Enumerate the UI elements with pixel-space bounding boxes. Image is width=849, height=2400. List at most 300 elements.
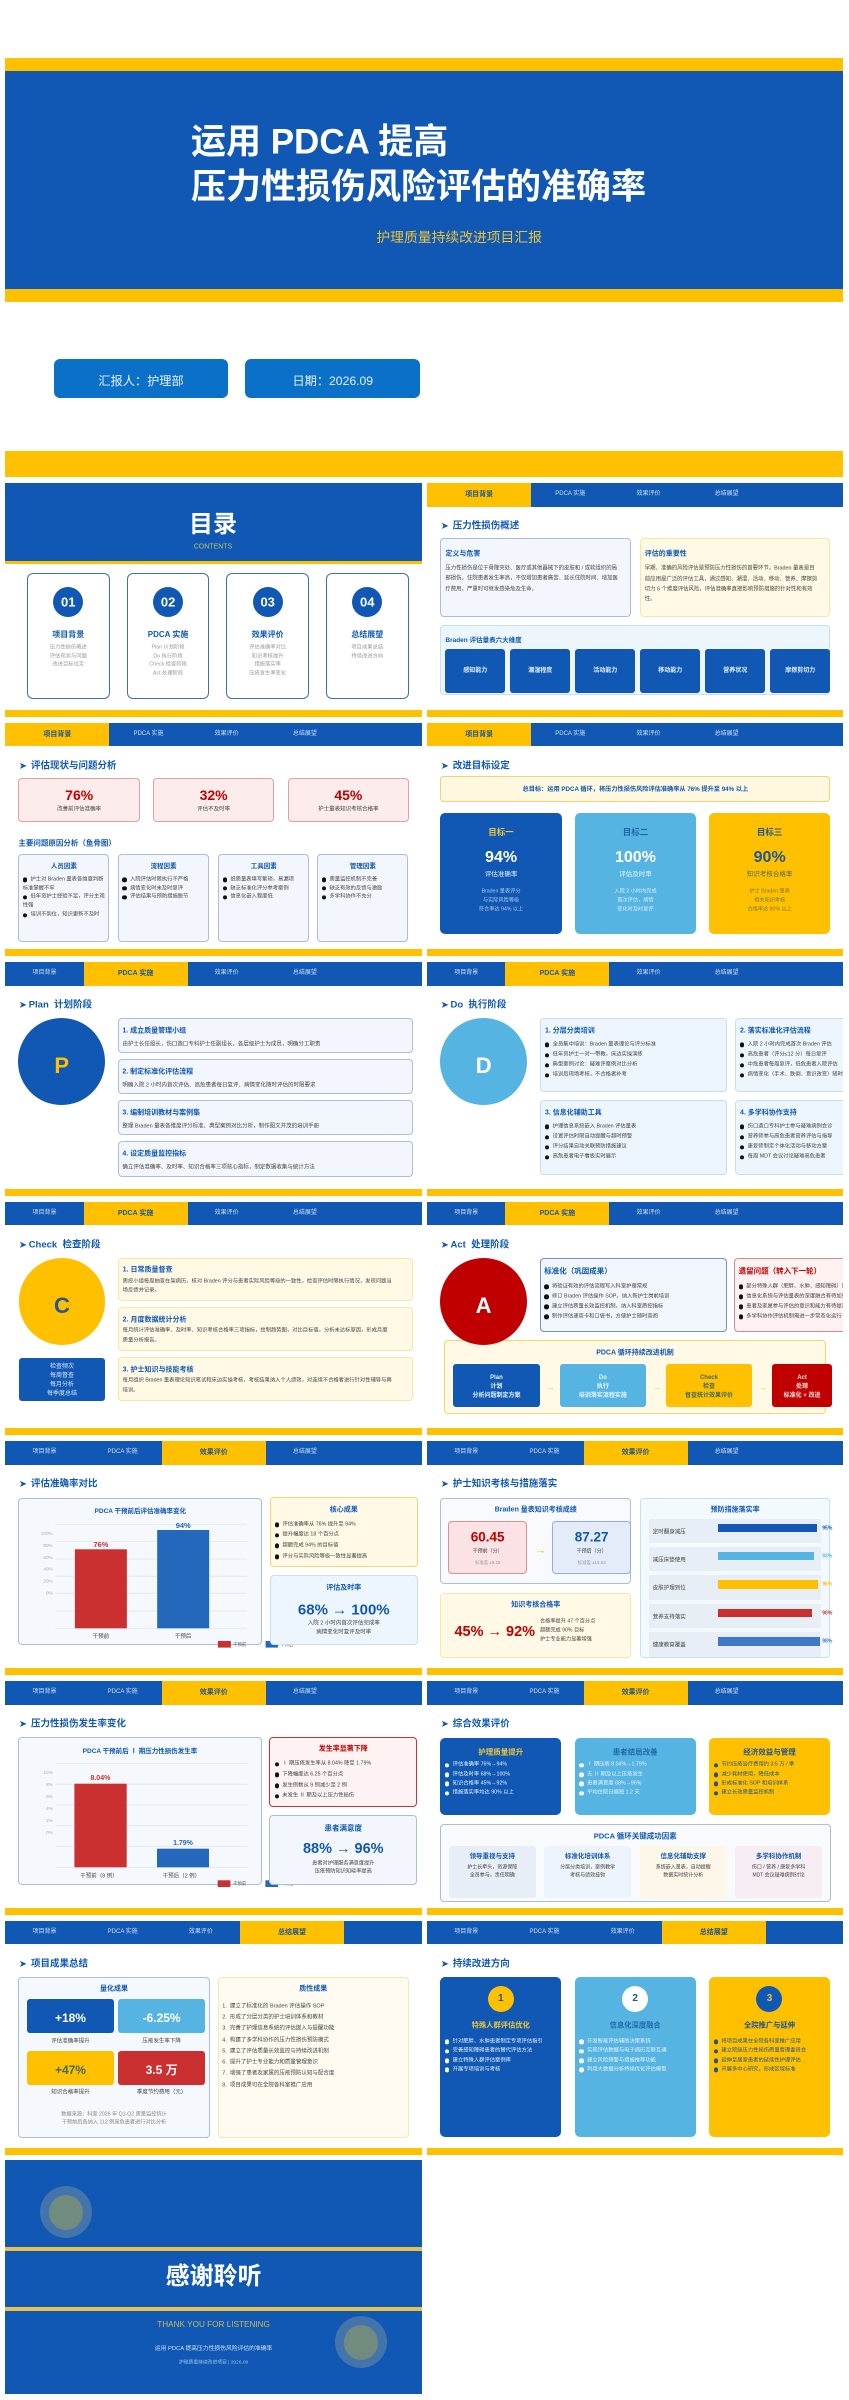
slide: incidence change: 总结展望 (293, 1689, 317, 1695)
do block 3 (540, 1100, 727, 1175)
card 04 (326, 573, 409, 699)
card: informatization (575, 1977, 696, 2137)
panel: key results: 提升幅度达 18 个百分点 (282, 1532, 339, 1538)
title line 1: 运用 PDCA 提高 (191, 122, 448, 162)
subtitle: 护理质量持续改进项目汇报 (376, 230, 542, 245)
panel: quantitative: 量化成果 (100, 1985, 128, 1992)
plan step 1: 由护士长任组长，伤口造口专科护士任副组长，各层级护士为成员，明确分工职责 (122, 1042, 320, 1048)
step: Act: 处理 (796, 1384, 808, 1390)
goal 3: 知识考核合格率 (747, 871, 792, 878)
slide: Check: 总结展望 (293, 1210, 317, 1216)
card: special populations: 开展专项培训与考核 (453, 2066, 500, 2072)
contents english: CONTENTS (194, 543, 232, 550)
card 02: Act 处理阶段 (153, 670, 183, 676)
factor: collaboration: 伤口 / 营养 / 康复多学科 (752, 1864, 805, 1870)
panel: prevention measures (640, 1498, 830, 1658)
metric: savings (118, 2051, 205, 2085)
panel: qualitative: 4. 构建了多学科协作的压力性损伤预防模式 (222, 2037, 329, 2043)
slide: goals: 效果评价 (636, 731, 660, 737)
panel: satisfaction: 患者对护理服务满意度提升 (312, 1860, 374, 1866)
card: informatization: 实现评估数据与电子病历互联互通 (587, 2048, 667, 2054)
section title: ➤ (441, 760, 448, 770)
measure: education: 健康教育覆盖 (653, 1642, 686, 1648)
score after: 87.27 (575, 1529, 609, 1544)
bar chart: incidence: 10% (44, 1770, 53, 1775)
panel: incidence drop: 下降幅度达 6.25 个百分点 (282, 1771, 343, 1777)
date button (245, 359, 420, 398)
card: economy: 节约压疮治疗费用约 3.5 万 / 季 (721, 1762, 794, 1768)
slide: current status (5, 723, 422, 949)
plan step 2: 2. 制定标准化评估流程 (122, 1068, 193, 1075)
section title: 护士知识考核与措施落实 (453, 1479, 557, 1490)
decorative circle top (40, 2186, 92, 2238)
bar chart: accuracy: 干预后 (175, 1632, 192, 1640)
section title: ➤ (19, 999, 27, 1009)
card 01: 项目背景 (52, 630, 84, 639)
slide: Plan: 总结展望 (293, 970, 317, 976)
panel: definition: 定义与危害 (445, 551, 480, 558)
panel: importance (640, 538, 830, 617)
panel: success factors (440, 1824, 831, 1902)
bar chart: incidence: 0% (46, 1830, 53, 1835)
measure: skin care: 皮肤护理到位 (653, 1585, 686, 1591)
check frequency box (19, 1358, 105, 1401)
slide: results summary: PDCA 实施 (108, 1929, 138, 1935)
slide: knowledge and measures (427, 1441, 843, 1668)
arrow: → (653, 1383, 661, 1392)
panel: qualitative (218, 1977, 409, 2138)
panel: prevention measures: 96% (822, 1582, 832, 1588)
cause: management: 管理因素 (350, 862, 376, 869)
factor: leadership: 全员参与，责任明确 (470, 1872, 515, 1878)
date button: 日期：2026.09 (292, 374, 373, 388)
card: informatization: 建立风险预警与措施推荐功能 (587, 2057, 656, 2063)
panel: quantitative: 季度节约费用（元） (137, 2090, 186, 2096)
do block 1: 1. 分层分类培训 (545, 1027, 595, 1034)
english thanks: THANK YOU FOR LISTENING (157, 2320, 270, 2329)
goal 1: 目标一 (488, 827, 514, 837)
factor: informatization: 系统嵌入量表，自动提醒 (656, 1864, 711, 1870)
goal 3: 合格率达 90% 以上 (747, 906, 792, 912)
panel: quantitative (18, 1977, 210, 2138)
metric: savings: 3.5 万 (146, 2063, 178, 2077)
card: hospital rollout: 全院推广与延伸 (744, 2020, 795, 2029)
slide: Plan (5, 962, 422, 1189)
card 03 (226, 573, 309, 699)
section title: ➤ (441, 999, 448, 1009)
measure: nutrition: 营养支持落实 (653, 1614, 686, 1620)
do block 2: 2. 落实标准化评估流程 (740, 1027, 811, 1034)
slide: accuracy comparison: 总结展望 (293, 1449, 317, 1455)
check item 3: 每月组织 Braden 量表理论知识笔试和床边实操考核，考核结果纳入个人绩效，对连续不合格者进行针对性辅导与再 (123, 1378, 392, 1384)
bar chart: incidence: 干预后（2 例） (163, 1871, 200, 1879)
slide: pressure injury overview: 效果评价 (636, 491, 660, 497)
slide: accuracy comparison: 项目背景 (32, 1449, 56, 1455)
bar chart: accuracy: 20% (44, 1578, 53, 1583)
step: Plan: 计划 (490, 1384, 502, 1390)
slide: thank you (5, 2160, 422, 2394)
card: special populations: 特殊人群评估优化 (472, 2020, 530, 2029)
slide: incidence change: 项目背景 (32, 1689, 56, 1695)
panel: satisfaction: 压疮预防知识知晓率提高 (315, 1868, 372, 1874)
panel: importance: 性。 (645, 597, 656, 603)
bar chart: accuracy: 80% (44, 1542, 53, 1547)
goal 3: 90% (754, 849, 786, 866)
metric: accuracy (27, 1999, 114, 2033)
plan step 3: 3. 编制培训教材与案例集 (122, 1109, 200, 1116)
cause: tools: 信息化嵌入程度低 (230, 894, 273, 900)
panel: accuracy chart (18, 1498, 262, 1645)
panel: Braden dimensions: 潮湿程度 (528, 668, 552, 674)
arrow: → (535, 1544, 546, 1556)
card 03: 03 (260, 594, 275, 609)
overall goal banner (440, 776, 830, 802)
cause: people (18, 854, 109, 942)
step: Do: 培训落实流程实施 (579, 1393, 627, 1399)
section title: ➤ (441, 1718, 448, 1728)
bar chart: accuracy: 0% (46, 1590, 53, 1595)
remaining issues box: 多学科协作评估机制需进一步常态化运行 (746, 1313, 842, 1319)
measure: mattress: 减压床垫使用 (653, 1557, 686, 1563)
bar chart: accuracy: 94% (176, 1520, 191, 1529)
slide: future directions: PDCA 实施 (529, 1929, 559, 1935)
panel: pass rate: 护士专业能力显著增强 (540, 1637, 592, 1643)
cause: people: 低年资护士经验不足，评分主观 (30, 894, 105, 900)
factor: collaboration (735, 1846, 822, 1898)
card: special populations: 建立特殊人群评估案例库 (453, 2057, 511, 2063)
panel: pass rate: 超额完成 90% 目标 (540, 1628, 584, 1634)
slide: pressure injury overview: 项目背景 (465, 491, 493, 498)
standardize box: 标准化（巩固成果） (544, 1266, 612, 1275)
section title: 评估准确率对比 (31, 1479, 98, 1490)
slide: contents (5, 483, 422, 709)
score before (448, 1521, 527, 1574)
panel: pass rate: 45% → 92% (454, 1624, 535, 1640)
cause: people: 人员因素 (51, 862, 77, 869)
plan step 1 (118, 1018, 413, 1053)
slide: Check: 项目背景 (32, 1210, 56, 1216)
plan step 4: 4. 设定质量监控指标 (122, 1150, 186, 1157)
card 02: Plan 计划阶段 (151, 645, 185, 651)
card 01: 改进目标设定 (52, 662, 84, 668)
panel: definition (440, 538, 631, 617)
panel: definition: 部损伤。住院患者发生率高，不仅增加患者痛苦、延长住院时间、增加医 (445, 576, 618, 582)
score before: 干预前（分） (473, 1548, 503, 1554)
step: Do: 执行 (597, 1384, 609, 1390)
D circle (440, 1018, 527, 1105)
standardize box: 将验证有效的评估流程写入科室护理常规 (552, 1283, 647, 1289)
slide: Act: 项目背景 (454, 1210, 478, 1216)
decorative circle bottom (335, 2316, 387, 2368)
do block 3: 高危患者电子看板实时展示 (553, 1154, 616, 1160)
slide: goals: PDCA 实施 (555, 731, 585, 737)
bar chart: incidence: 2% (46, 1818, 53, 1823)
card: nursing quality (440, 1738, 561, 1815)
step: Check: 督查统计效果评价 (685, 1393, 733, 1399)
check item 2: 2. 月度数据统计分析 (123, 1316, 186, 1323)
card: special populations: 1 (498, 1993, 504, 2004)
C circle (19, 1258, 105, 1345)
factor: collaboration: 多学科协作机制 (756, 1853, 801, 1860)
card: nursing quality: 知识合格率 45%→92% (453, 1780, 507, 1786)
slide: incidence change: PDCA 实施 (108, 1689, 138, 1695)
project line: 运用 PDCA 提高压力性损伤风险评估的准确率 (155, 2346, 272, 2352)
panel: prevention measures: 98% (822, 1639, 832, 1645)
goal 2: 目标二 (623, 827, 648, 837)
panel: incidence drop: 发生例数从 9 例减少至 2 例 (282, 1782, 347, 1788)
check frequency box: 每月分析 (50, 1382, 74, 1388)
card: hospital rollout: 延伸至居家患者的延续性护理评估 (721, 2057, 801, 2063)
panel: key results: 评估准确率从 76% 提升至 94% (282, 1521, 356, 1527)
card: informatization: 开发智能评估辅助决策系统 (587, 2038, 651, 2044)
factor: informatization: 信息化辅助支撑 (661, 1853, 706, 1860)
section title: ➤ (19, 1718, 27, 1728)
section title: ➤ (441, 1958, 448, 1968)
standardize box: 建立评估质量长效监控机制，纳入科室质控指标 (552, 1303, 663, 1309)
panel: qualitative: 8. 项目成果可在全院各科室推广应用 (222, 2082, 312, 2088)
slide: results summary (5, 1921, 422, 2147)
D circle: D (476, 1053, 492, 1078)
card: economy: 形成标准化 SOP 和培训体系 (721, 1780, 788, 1786)
card 03: 评估准确率对比 (249, 645, 286, 651)
do block 1: 低年资护士一对一带教，床边实操演练 (553, 1051, 643, 1057)
section title: 综合效果评价 (453, 1718, 510, 1729)
do block 3: 设置评估时限自动提醒与超时预警 (553, 1133, 632, 1139)
goal 2: 入院 2 小时内完成 (614, 889, 657, 895)
card: economy: 建立长效质量监控机制 (721, 1790, 774, 1796)
slide: Do (427, 962, 843, 1189)
metric: pass rate: +47% (55, 2063, 86, 2077)
check item 1: 场反馈并记录。 (123, 1287, 160, 1293)
card: patient outcomes: 无 Ⅱ 期及以上压疮发生 (587, 1771, 643, 1777)
panel: Braden scores (440, 1498, 631, 1584)
measure: turning (649, 1519, 821, 1543)
card 03: 效果评价 (252, 630, 284, 639)
PDCA cycle panel (444, 1340, 826, 1414)
standardize box (540, 1258, 727, 1332)
card: special populations: 针对肥胖、水肿患者制定专项评估指引 (453, 2038, 543, 2044)
plan step 3: 整理 Braden 量表各维度评分标准、典型案例对比分析，制作图文并茂的培训手册 (122, 1124, 319, 1130)
slide: Check (5, 1202, 422, 1428)
factor: training (544, 1846, 631, 1898)
panel: Braden dimensions: 营养状况 (723, 668, 747, 674)
bar chart: accuracy: 40% (44, 1566, 53, 1571)
factor: training: 标准化培训体系 (565, 1853, 610, 1860)
reporter button (54, 359, 228, 398)
slide: results summary: 项目背景 (32, 1929, 56, 1935)
section title: ➤ (19, 1958, 27, 1968)
PDCA cycle panel: PDCA 循环持续改进机制 (596, 1350, 674, 1357)
panel: quantitative: 压疮发生率下降 (142, 2038, 181, 2044)
slide: current status: 总结展望 (293, 731, 317, 737)
slide: accuracy comparison: PDCA 实施 (108, 1449, 138, 1455)
slide: knowledge and measures: 项目背景 (454, 1449, 478, 1455)
arrow: → (547, 1383, 555, 1392)
factor: leadership: 领导重视与支持 (470, 1853, 515, 1860)
cause: people: 性强 (23, 903, 33, 909)
slide: pressure injury overview: 总结展望 (715, 491, 739, 497)
goal 1: Braden 量表评分 (482, 889, 521, 895)
goal 1: 94% (485, 849, 517, 866)
card 02: Check 检查阶段 (149, 662, 187, 668)
panel: quantitative: 数据来源：科室 2026 年 Q1-Q2 质量监控统计 (61, 2111, 167, 2117)
panel: timeliness: 入院 2 小时内首次评估完成率 (308, 1621, 380, 1627)
cause: process: 评估结果与预防措施脱节 (130, 894, 188, 900)
panel: prevention measures: 95% (822, 1525, 832, 1531)
stat: 45%: 护士量表知识考核合格率 (318, 806, 379, 812)
do block 4: 每周 MDT 会议讨论疑难高危患者 (748, 1154, 826, 1160)
cause: tools (218, 854, 309, 942)
factor: informatization (640, 1846, 727, 1898)
step: Check (666, 1364, 752, 1407)
section title: ➤ (441, 520, 448, 530)
factor: training: 考核与绩效挂钩 (570, 1872, 605, 1878)
bar chart: accuracy: 76% (94, 1539, 109, 1548)
slide: current status: 效果评价 (215, 731, 239, 737)
card: patient outcomes: 患者结局改善 (613, 1747, 658, 1756)
goal 2: 变化时及时复评 (617, 906, 654, 912)
slide: Act: 总结展望 (715, 1210, 739, 1216)
slide: results summary: 效果评价 (189, 1929, 213, 1935)
check item 1 (118, 1258, 413, 1301)
factor: leadership: 护士长牵头，资源保障 (467, 1864, 517, 1870)
do block 1 (540, 1018, 727, 1092)
card 01 (27, 573, 110, 699)
panel: incidence drop: 未发生 Ⅱ 期及以上压力性损伤 (282, 1793, 354, 1799)
stat: 76% (18, 778, 140, 822)
panel: incidence chart: PDCA 干预前后 Ⅰ 期压力性损伤发生率 (83, 1747, 197, 1754)
card: informatization: 2 (632, 1993, 638, 2004)
stat: 32%: 32% (200, 787, 228, 803)
plan step 2 (118, 1059, 413, 1094)
check item 3 (118, 1357, 413, 1401)
card: nursing quality: 评估及时率 68%→100% (453, 1771, 510, 1777)
panel: key results: 评分与实际风险等级一致性显著提高 (282, 1553, 367, 1559)
panel: Braden dimensions: 移动能力 (658, 668, 682, 674)
remaining issues box: 遗留问题（转入下一轮） (739, 1266, 821, 1275)
panel: definition: 压力性损伤是位于骨隆突处、医疗或其他器械下的皮肤和 / 或软组织的局 (445, 566, 617, 572)
plan step 4 (118, 1141, 413, 1177)
do block 1: 全员集中培训：Braden 量表理论与评分标准 (553, 1041, 656, 1047)
P circle (18, 1018, 105, 1105)
slide: future directions: 项目背景 (454, 1929, 478, 1935)
slide: knowledge and measures: PDCA 实施 (529, 1449, 559, 1455)
panel: prevention measures: 93% (822, 1553, 832, 1559)
section title: ➤ (19, 760, 27, 770)
panel: incidence drop: 发生率显著下降 (319, 1746, 368, 1753)
stat: 76%: 76% (65, 787, 93, 803)
bar chart: incidence: 6% (46, 1794, 53, 1799)
metric: pass rate (27, 2051, 114, 2085)
slide: overall evaluation: PDCA 实施 (529, 1689, 559, 1695)
fishbone subheading: 主要问题原因分析（鱼骨图） (18, 838, 116, 847)
panel: quantitative: 干预前后各纳入 112 例高危患者进行对比分析 (62, 2120, 166, 2126)
goal 2 (575, 813, 696, 934)
panel: prevention measures: 预防措施落实率 (711, 1506, 760, 1513)
do block 1: 典型案例讨论：疑难评案例对比分析 (553, 1062, 637, 1068)
panel: timeliness: 评估及时率 (326, 1584, 361, 1591)
check frequency box: 每周督查 (50, 1373, 74, 1379)
goal 3: 相关知识考核 (754, 897, 785, 903)
card 02 (127, 573, 209, 699)
panel: key results: 超额完成 94% 的目标值 (282, 1542, 338, 1548)
cause: tools: 工具因素 (251, 862, 277, 869)
bar chart: incidence: 8% (46, 1782, 53, 1787)
section title: 压力性损伤概述 (453, 520, 519, 531)
slide: future directions (427, 1921, 843, 2147)
card: hospital rollout: 开展多中心研究，形成区域标准 (721, 2066, 796, 2072)
do block 4: 营养师参与高危患者营养评估与指导 (748, 1133, 832, 1139)
card 04: 持续改进方向 (351, 653, 383, 659)
score after: 干预后（分） (577, 1548, 607, 1554)
bar chart: incidence: 1.79% (173, 1840, 194, 1847)
panel: qualitative: 2. 形成了分层分类的护士培训体系和教材 (222, 2014, 323, 2020)
slide: pressure injury overview (427, 483, 843, 709)
card: economy: 减少耗材使用，降低成本 (721, 1771, 780, 1777)
panel: Braden dimensions: 感知能力 (463, 668, 487, 674)
stat: 76%: 改善前评估准确率 (57, 806, 101, 812)
cause: management (317, 854, 408, 942)
step: Plan: Plan (490, 1375, 503, 1381)
check item 2 (118, 1307, 413, 1351)
card: nursing quality: 评估准确率 76%→94% (453, 1762, 507, 1768)
check frequency box: 检查频次 (50, 1364, 74, 1370)
bar chart: incidence: 干预前 (233, 1880, 247, 1887)
plan step 2: 明确入院 2 小时内首次评估、高危患者每日复评、病情变化随时评估的时限要求 (122, 1083, 316, 1089)
step: Act (772, 1364, 832, 1407)
panel: incidence chart (18, 1737, 262, 1885)
panel: quantitative: 知识合格率提升 (51, 2090, 90, 2096)
card: informatization: 信息化深度融合 (610, 2020, 661, 2029)
slide: Plan: PDCA 实施 (118, 970, 153, 977)
slide: Do: 总结展望 (715, 970, 739, 976)
card 02: PDCA 实施 (148, 630, 188, 639)
factor: leadership (449, 1846, 536, 1898)
cause: people: 培训不到位，知识更新不及时 (30, 912, 99, 918)
check item 1: 质控小组每周抽查在架病历，核对 Braden 评分与患者实际风险等级的一致性，检查评估时限执行情况，发现问题当 (123, 1278, 392, 1284)
cause: process: 流程因素 (150, 862, 176, 869)
slide: future directions: 效果评价 (611, 1929, 635, 1935)
card: hospital rollout (709, 1977, 830, 2137)
do block 4: 伤口造口专科护士参与疑难病例会诊 (748, 1123, 832, 1129)
cause: management: 缺乏有效的反馈与激励 (329, 885, 382, 891)
goal 2: 首次评估，病情 (617, 897, 654, 903)
panel: prevention measures: 90% (822, 1610, 832, 1616)
do block 2: 高危患者（评分≤12 分）每日复评 (748, 1051, 827, 1057)
check item 1: 1. 日常质量督查 (123, 1266, 172, 1273)
do block 2: 中危患者每周复评，低危患者入院评估 (748, 1062, 838, 1068)
panel: pass rate: 知识考核合格率 (511, 1601, 560, 1608)
panel: satisfaction: 88% → 96% (303, 1841, 384, 1857)
panel: quantitative: 评估准确率提升 (51, 2038, 90, 2044)
card 02: 02 (161, 594, 175, 609)
slide: current status: 项目背景 (43, 731, 71, 738)
cause: management: 多学科协作不充分 (329, 894, 372, 900)
do block 2: 入院 2 小时内完成首次 Braden 评估 (748, 1041, 832, 1047)
bar chart: incidence: 干预前（9 例） (81, 1871, 118, 1879)
slide: Do: 项目背景 (454, 970, 478, 976)
card 04: 项目成果总结 (351, 645, 383, 651)
slide: Do: 效果评价 (636, 970, 660, 976)
card 04: 总结展望 (351, 630, 383, 639)
slide: overall evaluation: 效果评价 (622, 1689, 650, 1696)
check item 3: 培训。 (123, 1387, 139, 1393)
card: patient outcomes: Ⅰ 期压疮 8.04%→1.79% (587, 1762, 647, 1768)
slide: incidence change (5, 1681, 422, 1907)
slide: incidence change: 效果评价 (200, 1689, 228, 1696)
card 04: 04 (360, 594, 375, 609)
card: patient outcomes: 平均住院日缩短 1.2 天 (587, 1790, 640, 1796)
